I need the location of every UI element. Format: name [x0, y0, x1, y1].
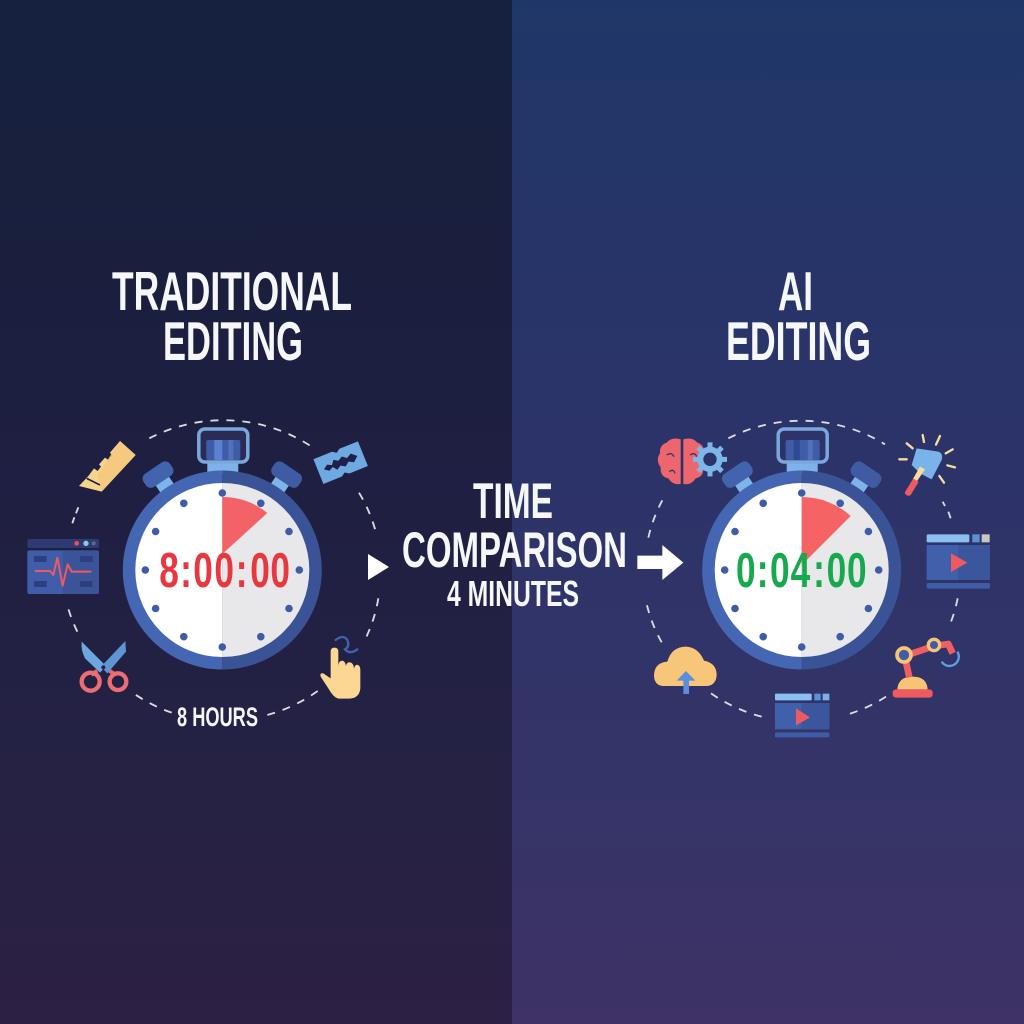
- icon: cloud upload: [654, 647, 717, 694]
- stopwatch: traditional: [123, 429, 322, 670]
- time readout: 0:04:00: [736, 543, 867, 598]
- tick dots: [721, 489, 882, 651]
- heading: traditional editing: EDITING: [163, 310, 303, 372]
- icon: pointing hand: [320, 637, 360, 699]
- case ring: [123, 470, 322, 670]
- elapsed wedge: [802, 497, 851, 565]
- icon: brain and gear: [658, 439, 727, 484]
- label: 8 hours: 8 HOURS: [177, 702, 258, 732]
- clock face: [135, 483, 309, 657]
- icon: magic wand hammer: [899, 435, 955, 496]
- crown: [199, 429, 248, 474]
- icon: ruler: [79, 441, 136, 492]
- icons: traditional tools: [27, 441, 368, 699]
- case ring: [702, 470, 901, 670]
- center label: [402, 473, 627, 614]
- tick dots: [142, 489, 303, 651]
- panel: AI background: [512, 0, 1024, 1024]
- center label: COMPARISON: [402, 522, 627, 578]
- icon: video window small: [775, 694, 829, 737]
- heading: AI editing: [726, 260, 871, 372]
- time readout: 8:00:00: [159, 543, 290, 598]
- heading: AI editing: EDITING: [726, 310, 871, 372]
- arrow: center to AI: [637, 545, 683, 580]
- side pushers: [720, 459, 884, 503]
- dashed orbit: AI: [646, 421, 958, 717]
- arrow: traditional to center: [368, 554, 389, 580]
- heading: AI editing: AI: [778, 260, 813, 322]
- panel: traditional background: [0, 0, 512, 1024]
- stopwatch: AI: [702, 429, 901, 670]
- center label: TIME: [473, 473, 553, 529]
- heading: traditional editing: TRADITIONAL: [112, 260, 352, 322]
- side pushers: [140, 459, 304, 503]
- icon: razor blade: [313, 441, 368, 484]
- dashed orbit: traditional: [67, 420, 378, 715]
- crown: [778, 429, 827, 474]
- icons: AI tools: [637, 435, 990, 737]
- clock face: [715, 483, 889, 657]
- elapsed wedge: [222, 497, 267, 554]
- center label: 4 MINUTES: [447, 573, 579, 614]
- icon: waveform window: [27, 539, 99, 594]
- icon: scissors: [81, 641, 126, 691]
- icon: robot arm: [893, 639, 959, 698]
- icon: video window: [927, 534, 990, 589]
- heading: traditional editing: [112, 260, 352, 372]
